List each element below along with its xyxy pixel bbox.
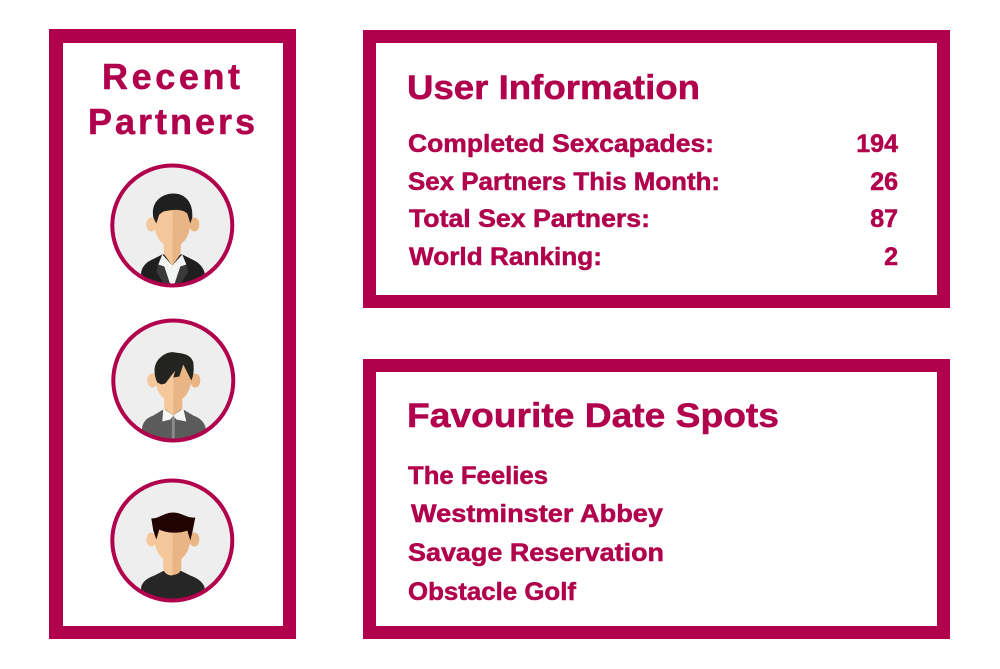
icon: partner avatar in grey jumper (113, 320, 233, 442)
list: date spots: Savage Reservation (408, 539, 664, 567)
list: date spots: The Feelies (408, 462, 548, 490)
stat: sex partners this month: Sex Partners This Month: (408, 168, 720, 196)
panel: user information (370, 36, 944, 302)
heading: recent partners: Recent (102, 56, 244, 97)
stat: total sex partners: 87 (870, 205, 898, 233)
list: date spots: Westminster Abbey (411, 500, 663, 528)
stat: total sex partners: Total Sex Partners: (409, 205, 650, 233)
stat: completed sexcapades (408, 130, 898, 158)
stat: sex partners this month: 26 (870, 168, 898, 196)
list: date spots (408, 462, 664, 606)
panel: favourite date spots (370, 366, 944, 632)
icon: partner avatar in suit (112, 166, 232, 288)
stat: world ranking (409, 243, 898, 271)
stat: world ranking: World Ranking: (409, 243, 602, 271)
icon: partner avatar in black t-shirt (112, 480, 232, 602)
heading: user information: User Information (407, 69, 700, 107)
panel: recent partners (49, 29, 296, 639)
stat: world ranking: 2 (884, 243, 898, 271)
stat: total sex partners (409, 205, 898, 233)
list: date spots: Obstacle Golf (408, 578, 577, 606)
heading: recent partners (88, 56, 258, 142)
stat: sex partners this month (408, 168, 898, 196)
heading: favourite date spots: Favourite Date Spots (407, 397, 779, 435)
stat: completed sexcapades: 194 (856, 130, 898, 158)
heading: recent partners: Partners (88, 101, 258, 142)
stat: completed sexcapades: Completed Sexcapades: (408, 130, 714, 158)
